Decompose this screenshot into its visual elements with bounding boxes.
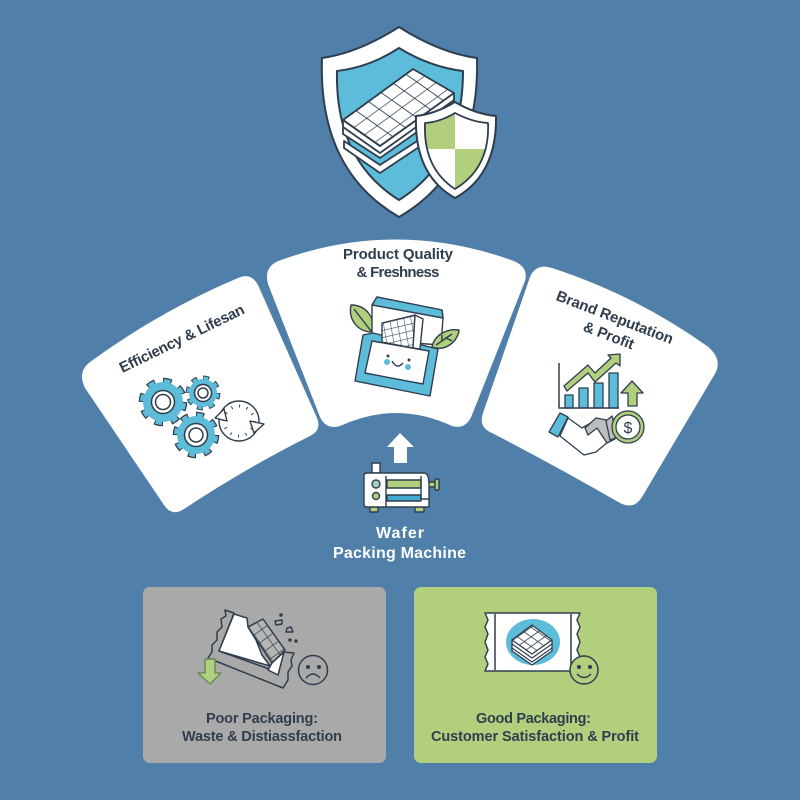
small shield quadrants xyxy=(426,114,484,188)
sad face xyxy=(298,656,328,684)
machine label: Packing Machine xyxy=(333,545,466,562)
panel: efficiency and lifespan xyxy=(82,276,318,512)
arrow: machine to product quality xyxy=(387,433,414,463)
machine label xyxy=(333,525,466,562)
card shape xyxy=(482,267,718,505)
icon: wafer protection shield xyxy=(322,27,496,217)
subheading: & Freshness xyxy=(356,264,440,281)
icon: smiling package xyxy=(350,297,459,396)
panel: good packaging xyxy=(414,587,657,763)
panel: brand reputation and profit xyxy=(482,267,718,505)
icon: torn wafer wrapper xyxy=(198,610,328,688)
crumbs xyxy=(275,620,293,632)
heading: Good Packaging: xyxy=(476,711,591,727)
large shield blue interior xyxy=(337,48,463,200)
heading: Product Quality xyxy=(343,246,454,263)
icon: growth chart and handshake xyxy=(549,354,644,455)
description: Customer Satisfaction & Profit xyxy=(431,729,639,745)
coin xyxy=(612,411,644,443)
down arrow xyxy=(198,659,221,684)
description: Waste & Distiassfaction xyxy=(182,729,342,745)
icon: sealed wafer packet xyxy=(485,613,598,684)
card shape xyxy=(267,240,526,427)
panel: poor packaging xyxy=(143,587,386,763)
trend arrow xyxy=(564,354,620,391)
panel: product quality and freshness xyxy=(267,240,526,427)
up arrow xyxy=(621,381,643,406)
card background xyxy=(414,587,657,763)
heading: Efficiency & Lifesan xyxy=(117,301,247,377)
smile face xyxy=(570,656,598,684)
large shield outline xyxy=(322,27,477,217)
card shape xyxy=(82,276,318,512)
icon: gears and clock xyxy=(143,379,264,454)
heading: Brand Reputation xyxy=(554,288,676,348)
heading: Poor Packaging: xyxy=(206,711,318,727)
dollar sign: $ xyxy=(624,420,633,437)
handshake xyxy=(560,418,614,455)
card background xyxy=(143,587,386,763)
small shield xyxy=(416,102,496,198)
subheading: & Profit xyxy=(581,318,636,353)
wafer stack xyxy=(343,69,454,173)
wafer stack xyxy=(512,640,552,665)
bars xyxy=(565,373,618,408)
icon: wafer packing machine xyxy=(364,463,439,512)
machine label: Wafer xyxy=(376,525,424,542)
